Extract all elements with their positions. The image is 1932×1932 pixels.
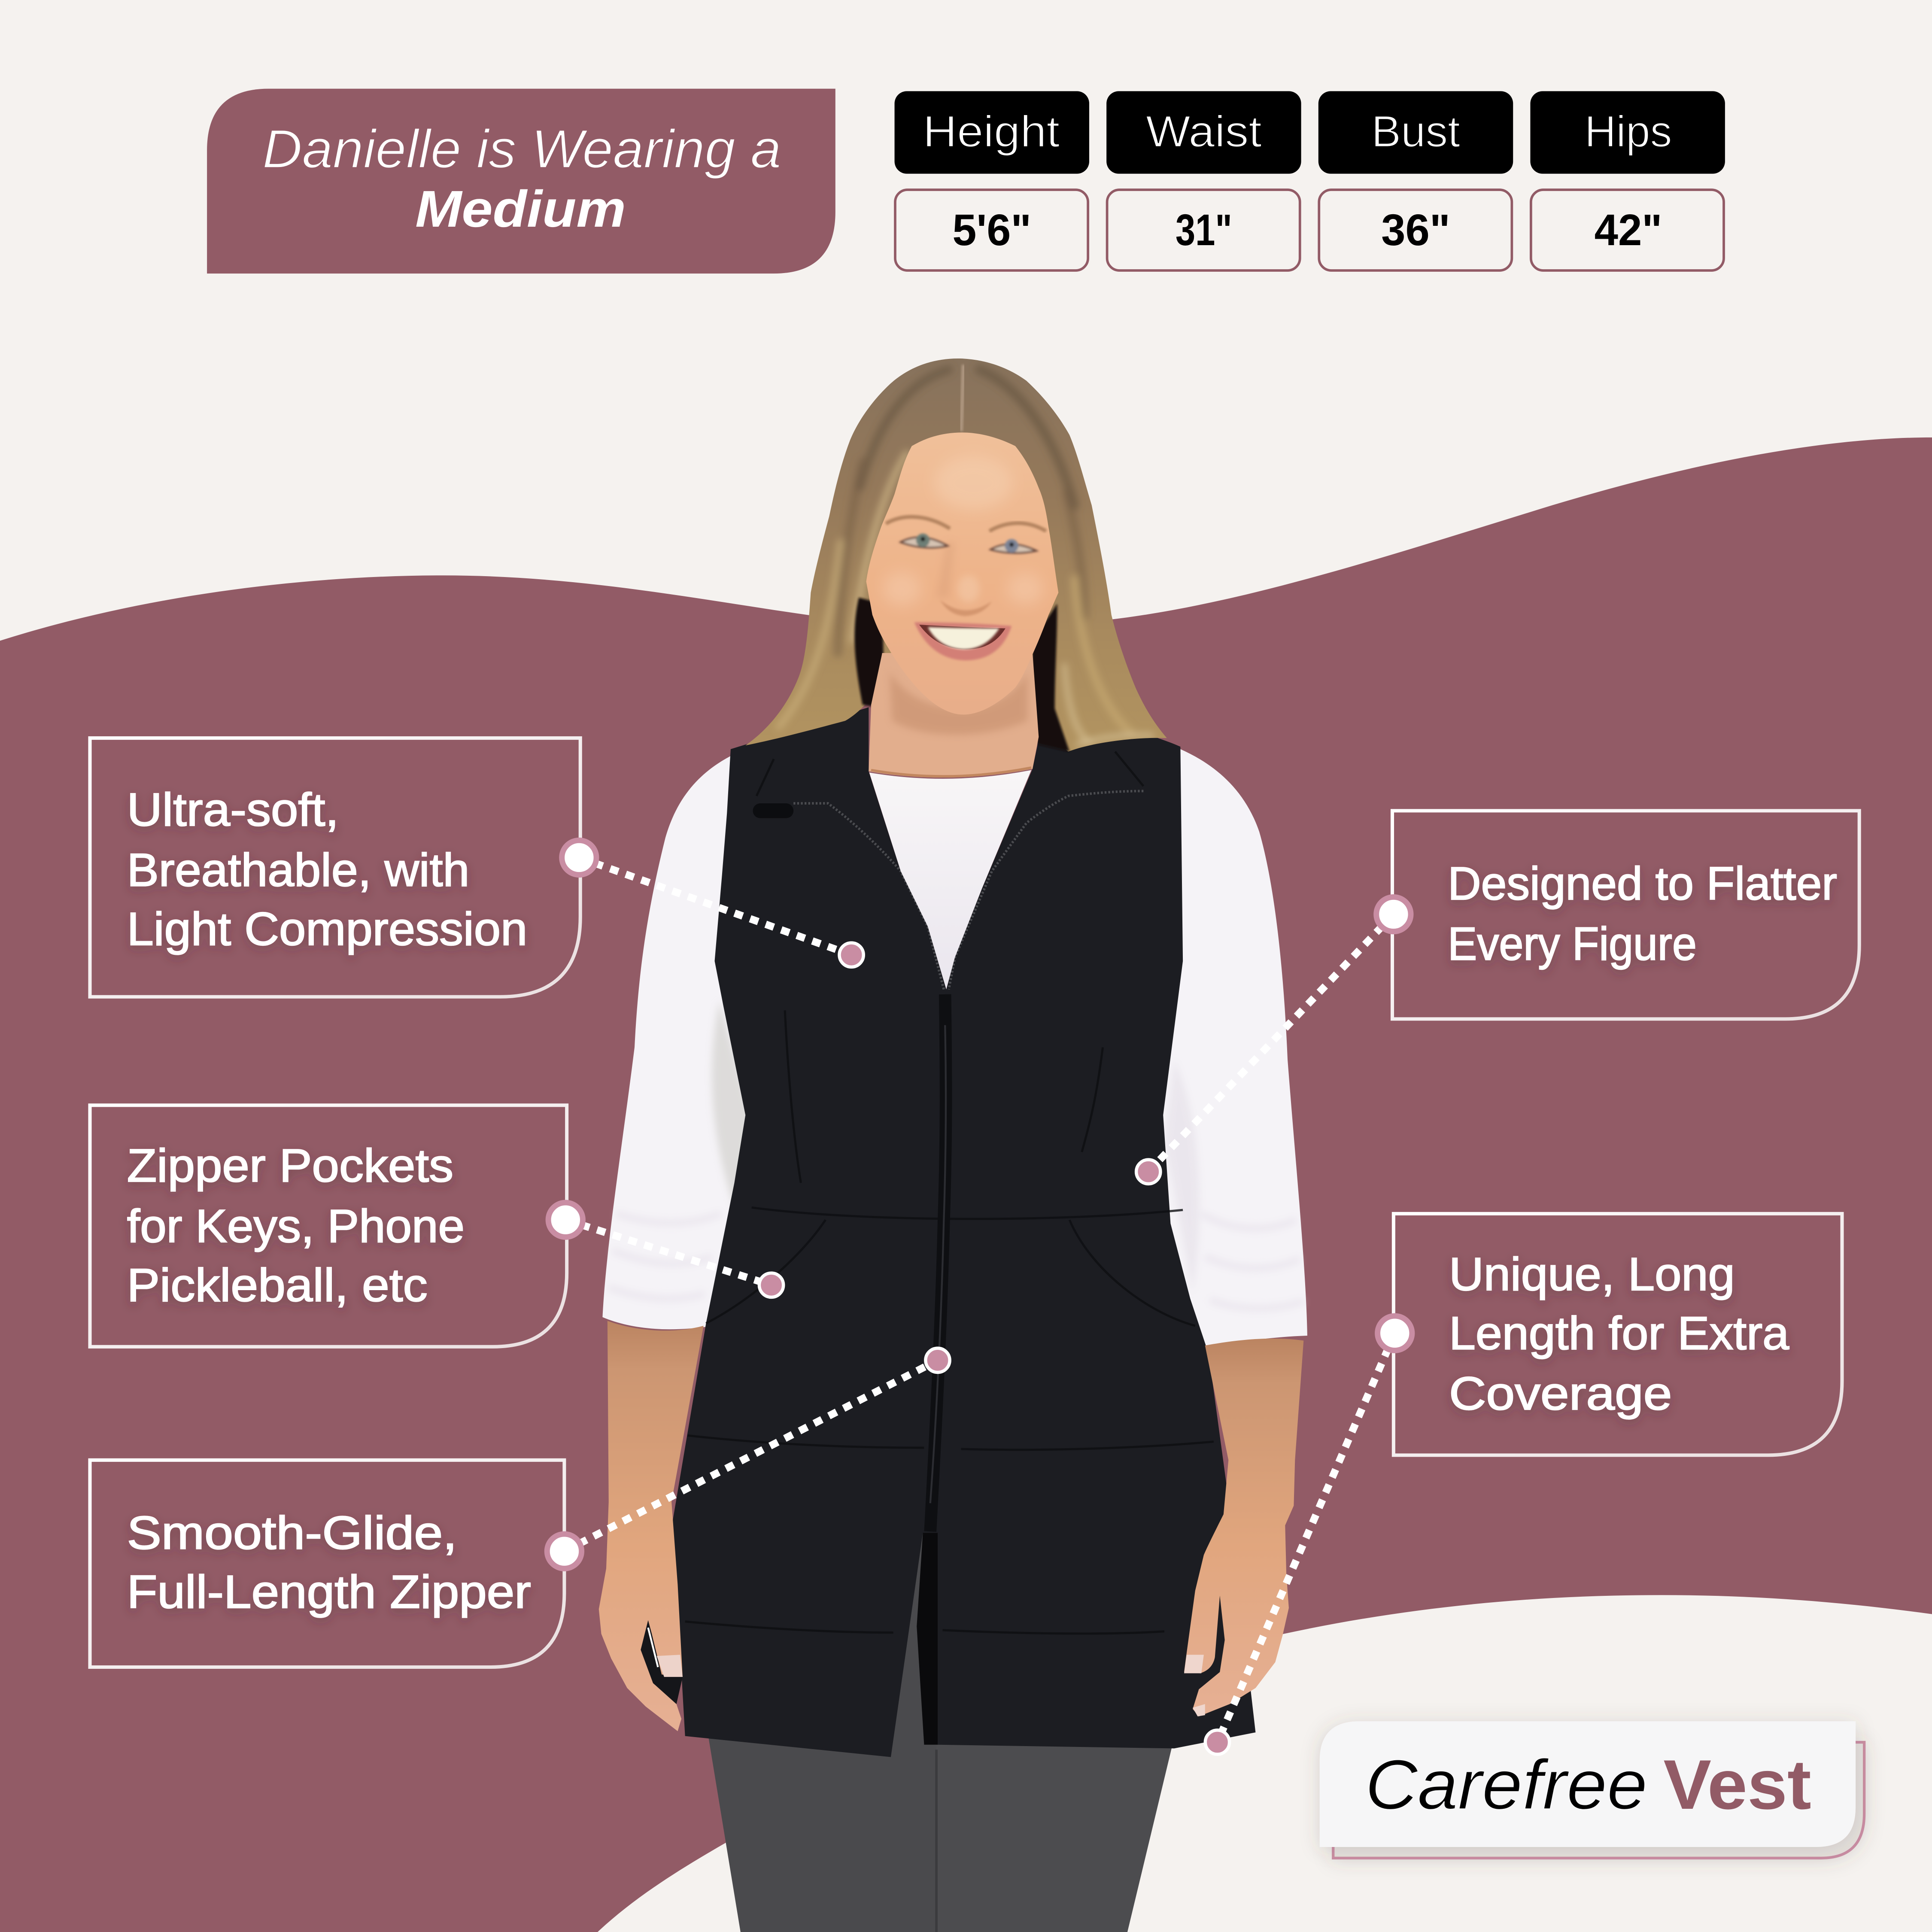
right sleeve — [1146, 749, 1307, 1348]
callout text: Light Compression — [127, 903, 527, 955]
callout text: Designed to Flatter — [1448, 857, 1837, 910]
callout: full-length zipper — [90, 1460, 564, 1667]
left forearm and hand — [599, 1321, 704, 1731]
size banner — [207, 89, 835, 273]
hips column — [1530, 91, 1725, 270]
pointer: ultra-soft to vest — [562, 840, 863, 967]
neck — [869, 653, 1039, 778]
dark hair under left jaw — [854, 598, 885, 708]
callout text: Full-Length Zipper — [127, 1566, 531, 1618]
callout: zipper pockets — [90, 1105, 567, 1347]
callout text: Smooth-Glide, — [127, 1507, 457, 1559]
right thumbnail — [1184, 1655, 1204, 1673]
callout box — [90, 1460, 564, 1667]
banner shape — [207, 89, 835, 273]
callout text: Zipper Pockets — [127, 1139, 453, 1192]
hair strands — [779, 370, 1152, 744]
label text: Carefree — [1365, 1745, 1647, 1824]
cheek highlight right — [1007, 573, 1044, 605]
bust column — [1318, 91, 1513, 270]
hips column: 42" — [1595, 205, 1662, 255]
callout box — [1394, 1214, 1842, 1455]
vest seams — [685, 752, 1214, 1634]
white tee — [869, 770, 1031, 990]
dark hair under right jaw — [1030, 604, 1069, 752]
label text: Vest — [1663, 1745, 1811, 1824]
callout text — [127, 1507, 531, 1618]
callout text — [1449, 1248, 1789, 1420]
zipper highlight — [930, 1025, 946, 1503]
smile — [914, 622, 1012, 660]
pointer: long length — [1205, 1316, 1412, 1754]
callout text — [1448, 857, 1837, 970]
nose — [936, 542, 992, 616]
under chin shadow — [890, 671, 1027, 735]
pointer: zipper pockets — [548, 1203, 784, 1297]
collar zipper left — [793, 803, 944, 990]
model wearing vest — [599, 358, 1307, 1932]
callout text: Length for Extra — [1449, 1307, 1789, 1360]
label card — [1320, 1721, 1856, 1847]
callout text — [127, 784, 527, 955]
leggings — [708, 1528, 1174, 1932]
hair parting — [961, 365, 963, 431]
product name label — [1320, 1721, 1864, 1858]
hair mass — [745, 358, 1167, 752]
left eye — [901, 534, 948, 548]
left sleeve — [602, 754, 770, 1329]
callout text: Breathable, with — [127, 844, 469, 896]
waist column — [1106, 91, 1301, 270]
callout box — [1392, 811, 1859, 1019]
callout text: Pickleball, etc — [127, 1259, 428, 1312]
waist column: 31" — [1176, 205, 1232, 255]
cheek highlight left — [882, 572, 922, 606]
right fingernail — [1193, 1704, 1205, 1716]
sleeve shading — [712, 1000, 752, 1214]
right forearm and hand — [1184, 1339, 1303, 1716]
zipper — [930, 994, 946, 1531]
left finger gap — [641, 1620, 683, 1704]
callout text: for Keys, Phone — [127, 1200, 465, 1252]
label outline — [1333, 1742, 1864, 1858]
callout box — [90, 1105, 567, 1347]
slit shadow — [917, 1533, 938, 1745]
face — [866, 432, 1058, 715]
height column: Height — [923, 106, 1060, 156]
pointer: full-length zipper — [547, 1348, 950, 1568]
callout text: Coverage — [1449, 1367, 1672, 1420]
bust column: 36" — [1381, 205, 1450, 255]
callout: ultra-soft — [90, 738, 580, 997]
collar flap — [753, 803, 793, 818]
callout box — [90, 738, 580, 997]
callout: unique long length — [1394, 1214, 1842, 1455]
hips column: Hips — [1585, 106, 1672, 156]
vest body — [673, 707, 1255, 1757]
sleeve folds — [609, 1214, 1303, 1308]
sleeve shading right — [1164, 1060, 1200, 1294]
forehead highlight — [934, 456, 1013, 510]
height column: 5'6" — [952, 205, 1031, 255]
mauve wave background — [0, 437, 1932, 1932]
left gap highlight — [648, 1628, 658, 1667]
callout text: Unique, Long — [1449, 1248, 1735, 1300]
collar zipper right — [949, 791, 1143, 990]
banner text line 1: Danielle is Wearing a — [262, 118, 781, 179]
bust column: Bust — [1371, 106, 1460, 156]
neckline shadow — [871, 768, 1031, 776]
callout text — [127, 1139, 465, 1312]
banner text line 2: Medium — [415, 180, 626, 238]
left thumbnail — [657, 1655, 683, 1677]
pointer: designed to flatter — [1136, 897, 1411, 1184]
callout text: Ultra-soft, — [127, 784, 339, 836]
right eye — [990, 539, 1036, 553]
callout: designed to flatter — [1392, 811, 1859, 1019]
height column — [895, 91, 1089, 270]
left eyebrow — [886, 517, 950, 529]
right eyebrow — [990, 523, 1046, 531]
measurements table — [895, 91, 1725, 270]
waist column: Waist — [1146, 106, 1262, 156]
callout text: Every Figure — [1448, 918, 1697, 970]
label text — [1365, 1745, 1811, 1824]
